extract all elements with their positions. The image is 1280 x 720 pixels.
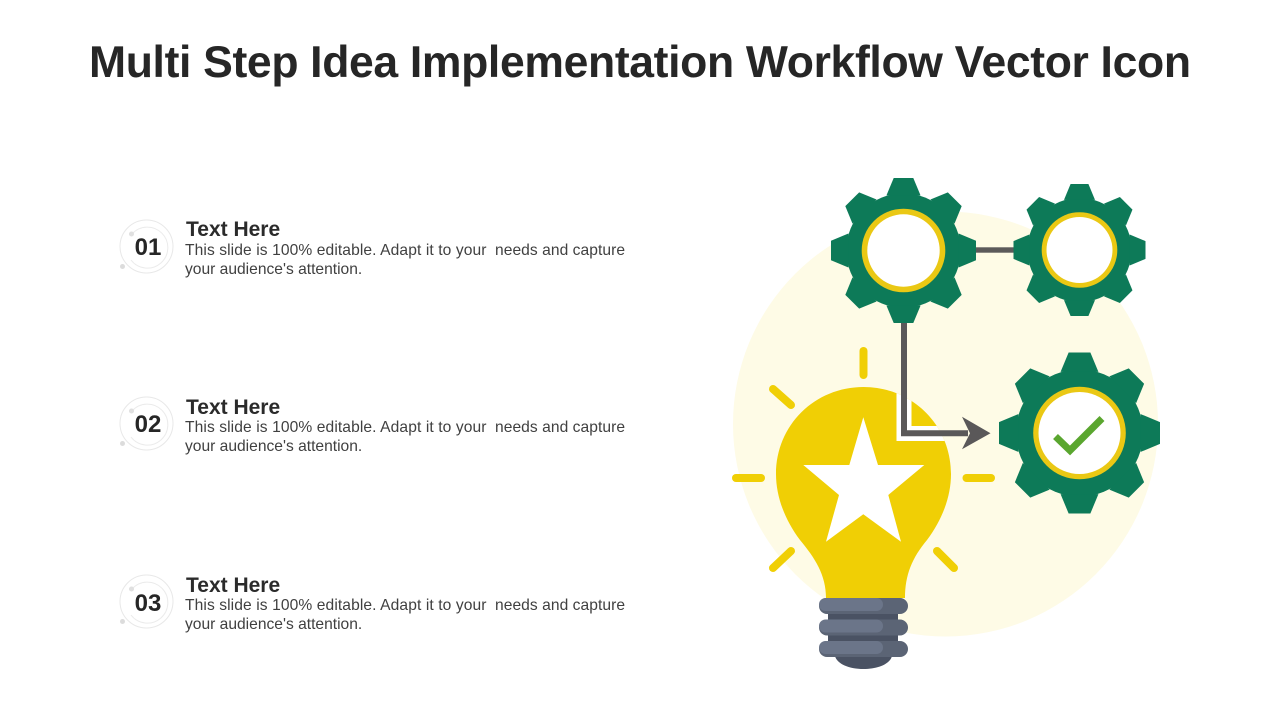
step 01 number badge: 01 xyxy=(135,234,161,261)
step 02 description: This slide is 100% editable. Adapt it to your xyxy=(185,419,486,436)
step 03 heading: Text Here xyxy=(186,574,280,597)
step 03 number badge xyxy=(120,575,173,628)
icon: light bulb rays xyxy=(736,351,991,568)
icon: light bulb xyxy=(776,387,951,598)
title: Multi Step Idea Implementation Workflow Vector Icon xyxy=(89,38,1191,87)
connector between top gears xyxy=(974,247,1016,253)
step 03 description: This slide is 100% editable. Adapt it to your xyxy=(185,597,486,614)
step 02 heading: Text Here xyxy=(186,396,280,419)
icon: large top gear xyxy=(831,178,976,323)
step 02 number badge xyxy=(120,397,173,450)
icon: bulb screw base xyxy=(819,598,908,669)
step 02 xyxy=(120,396,625,455)
step 02 description: your audience's attention. xyxy=(185,438,362,455)
step 01 description: This slide is 100% editable. Adapt it to your xyxy=(185,242,486,259)
step 03 description: needs and capture xyxy=(495,597,625,614)
step 01 number badge xyxy=(120,220,173,273)
arrow from gear to checked gear xyxy=(904,320,990,449)
step 03 description: your audience's attention. xyxy=(185,616,362,633)
step 01 heading: Text Here xyxy=(186,218,280,241)
icon: gear with check mark xyxy=(999,352,1160,514)
step 03 number badge: 03 xyxy=(135,590,161,617)
step 03 xyxy=(120,574,625,633)
step 01 xyxy=(120,218,625,278)
step 02 description: needs and capture xyxy=(495,419,625,436)
background circle xyxy=(733,212,1158,636)
step 02 number badge: 02 xyxy=(135,411,161,438)
icon: small top gear xyxy=(1014,184,1146,316)
check mark xyxy=(1056,418,1102,450)
step 01 description: needs and capture xyxy=(495,242,625,259)
illustration: idea to workflow xyxy=(733,178,1160,669)
white outline of arrow over bulb xyxy=(896,393,944,441)
star in bulb xyxy=(803,417,924,542)
step 01 description: your audience's attention. xyxy=(185,261,362,278)
